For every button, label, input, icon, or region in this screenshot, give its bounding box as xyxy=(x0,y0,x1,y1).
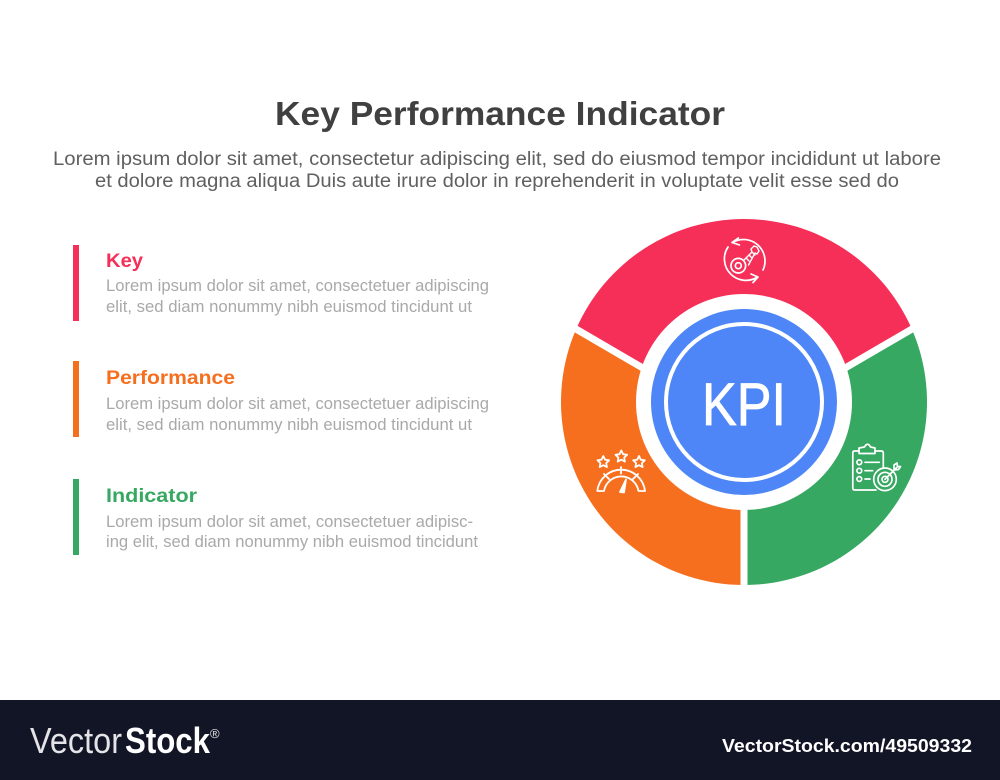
segment: green indicator xyxy=(744,329,927,585)
panel: indicator legend xyxy=(73,479,478,555)
subtitle text xyxy=(53,149,941,192)
footer logo xyxy=(30,720,211,761)
indicator accent bar xyxy=(73,479,79,555)
donut chart xyxy=(560,219,928,592)
segment: orange performance xyxy=(561,329,744,585)
performance description xyxy=(106,395,489,434)
footer logo: Stock xyxy=(125,720,211,761)
footer url: VectorStock.com/49509332 xyxy=(722,736,972,756)
key description: Lorem ipsum dolor sit amet, consectetuer adipiscing xyxy=(106,277,489,295)
center blue disc xyxy=(651,309,837,495)
performance description: Lorem ipsum dolor sit amet, consectetuer adipiscing xyxy=(106,395,489,413)
panel: key legend xyxy=(73,245,489,321)
indicator description: Lorem ipsum dolor sit amet, consectetuer adipisc- xyxy=(106,513,473,531)
title: Key Performance Indicator xyxy=(275,95,725,132)
icon: clipboard with target xyxy=(853,444,900,491)
key description xyxy=(106,277,489,316)
performance description: elit, sed diam nonummy nibh euismod tincidunt ut xyxy=(106,416,472,434)
performance accent bar xyxy=(73,361,79,437)
footer logo: Vector xyxy=(30,720,122,761)
performance heading: Performance xyxy=(106,368,235,389)
registered mark: ® xyxy=(210,726,220,741)
gap lines xyxy=(560,320,928,592)
subtitle text: et dolore magna aliqua Duis aute irure dolor in reprehenderit in voluptate velit esse sed do xyxy=(95,171,899,192)
indicator description xyxy=(106,513,478,551)
segment: red key xyxy=(576,219,912,427)
icon: gauge with stars xyxy=(597,450,645,492)
key accent bar xyxy=(73,245,79,321)
indicator description: ing elit, sed diam nonummy nibh euismod tincidunt xyxy=(106,533,478,551)
subtitle text: Lorem ipsum dolor sit amet, consectetur adipiscing elit, sed do eiusmod tempor incididunt ut labore xyxy=(53,149,941,170)
center white ring xyxy=(636,294,852,510)
key description: elit, sed diam nonummy nibh euismod tincidunt ut xyxy=(106,298,472,316)
footer bar xyxy=(0,700,1000,780)
center inner ring xyxy=(666,324,822,480)
icon: key with cycle arrows xyxy=(724,238,765,282)
KPI label: KPI xyxy=(702,371,786,438)
indicator heading: Indicator xyxy=(106,486,198,507)
key heading: Key xyxy=(106,251,143,272)
panel: performance legend xyxy=(73,361,489,437)
